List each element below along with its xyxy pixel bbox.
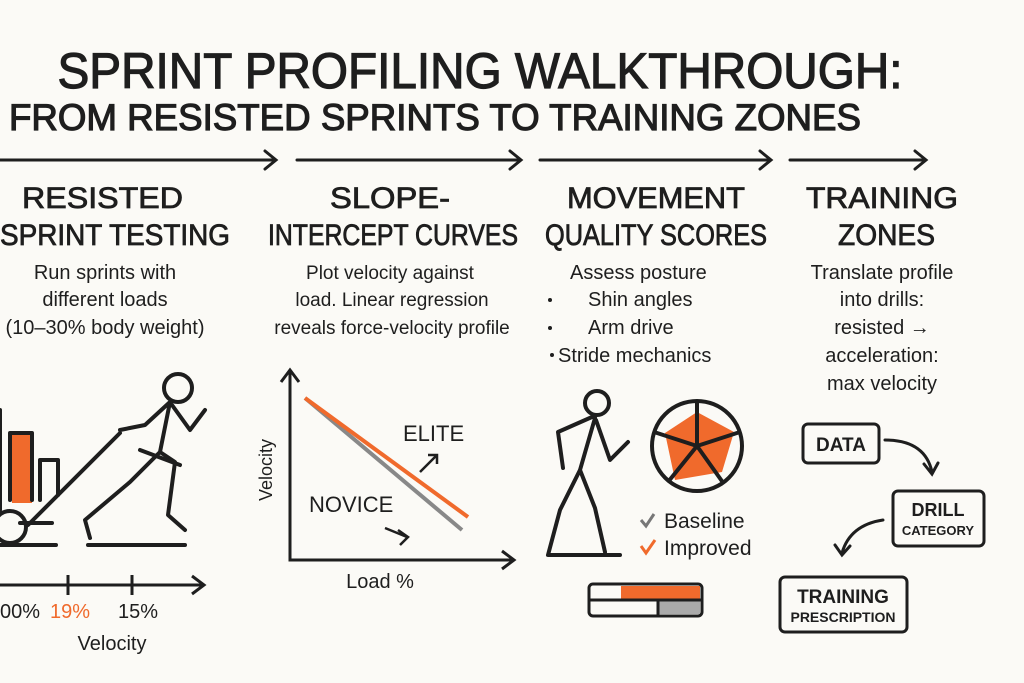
chart: force-velocity (256, 370, 514, 593)
chart: force-velocity: ELITE (403, 421, 464, 446)
arrows: flow (0, 151, 926, 169)
panel: movement quality scores: MOVEMENT (567, 182, 745, 215)
panel: resisted sprint testing (0, 182, 230, 655)
chart: force-velocity: Velocity (256, 439, 276, 501)
panel: training zones: into drills: (840, 289, 924, 311)
panel: training zones: Translate profile (811, 262, 953, 284)
panel: training zones: PRESCRIPTION (790, 609, 896, 625)
panel: slope-intercept curves: INTERCEPT CURVES (268, 219, 518, 252)
title: SPRINT PROFILING WALKTHROUGH: (58, 43, 902, 99)
icon: walking figure (548, 391, 628, 555)
panel: movement quality scores: Stride mechanics (558, 345, 711, 367)
flow: data to prescription (780, 424, 984, 632)
panel: movement quality scores: Assess posture (570, 262, 707, 284)
panel: resisted sprint testing: (10–30% body weight) (5, 317, 205, 339)
panel: movement quality scores: Arm drive (588, 317, 674, 339)
panel: training zones: DRILL (912, 500, 964, 520)
legend: baseline / improved (641, 510, 752, 560)
panel: resisted sprint testing: Run sprints with (34, 262, 176, 284)
panel: training zones: TRAINING (797, 587, 889, 608)
panel: training zones: ZONES (838, 219, 935, 252)
panel: resisted sprint testing: Velocity (78, 633, 146, 655)
panel: training zones: acceleration: (825, 345, 939, 367)
panel: movement quality scores: Shin angles (588, 289, 693, 311)
panel: resisted sprint testing: 15% (118, 601, 158, 623)
chart: force-velocity: NOVICE (309, 492, 393, 517)
icon: sled and runner (0, 374, 205, 545)
panel: slope-intercept curves (256, 182, 518, 593)
panel: resisted sprint testing: 00% (0, 601, 40, 623)
panel: training zones: TRAINING (806, 182, 958, 215)
panel: training zones: DATA (816, 435, 866, 456)
panel: training zones (780, 182, 984, 632)
panel: training zones: resisted → (834, 317, 930, 339)
axis: velocity (0, 575, 204, 595)
panel: resisted sprint testing: SPRINT TESTING (0, 219, 230, 252)
legend: baseline / improved: Improved (664, 537, 752, 560)
panel: slope-intercept curves: Plot velocity against (306, 263, 475, 284)
title (9, 43, 902, 138)
bar: progress (589, 584, 702, 616)
title: FROM RESISTED SPRINTS TO TRAINING ZONES (9, 97, 861, 138)
panel: training zones: max velocity (827, 373, 937, 395)
panel: training zones: CATEGORY (902, 523, 974, 538)
panel: resisted sprint testing: RESISTED (22, 182, 183, 215)
panel: slope-intercept curves: SLOPE- (330, 182, 450, 215)
chart: radar (652, 401, 742, 491)
chart: force-velocity: Load % (346, 571, 414, 593)
panel: slope-intercept curves: reveals force-velocity profile (274, 318, 510, 339)
panel: movement quality scores (545, 182, 767, 616)
legend: baseline / improved: Baseline (664, 510, 745, 533)
panel: resisted sprint testing: 19% (50, 601, 90, 623)
panel: slope-intercept curves: load. Linear regression (295, 290, 489, 311)
panel: movement quality scores: QUALITY SCORES (545, 219, 767, 252)
panel: resisted sprint testing: different loads (42, 289, 168, 311)
